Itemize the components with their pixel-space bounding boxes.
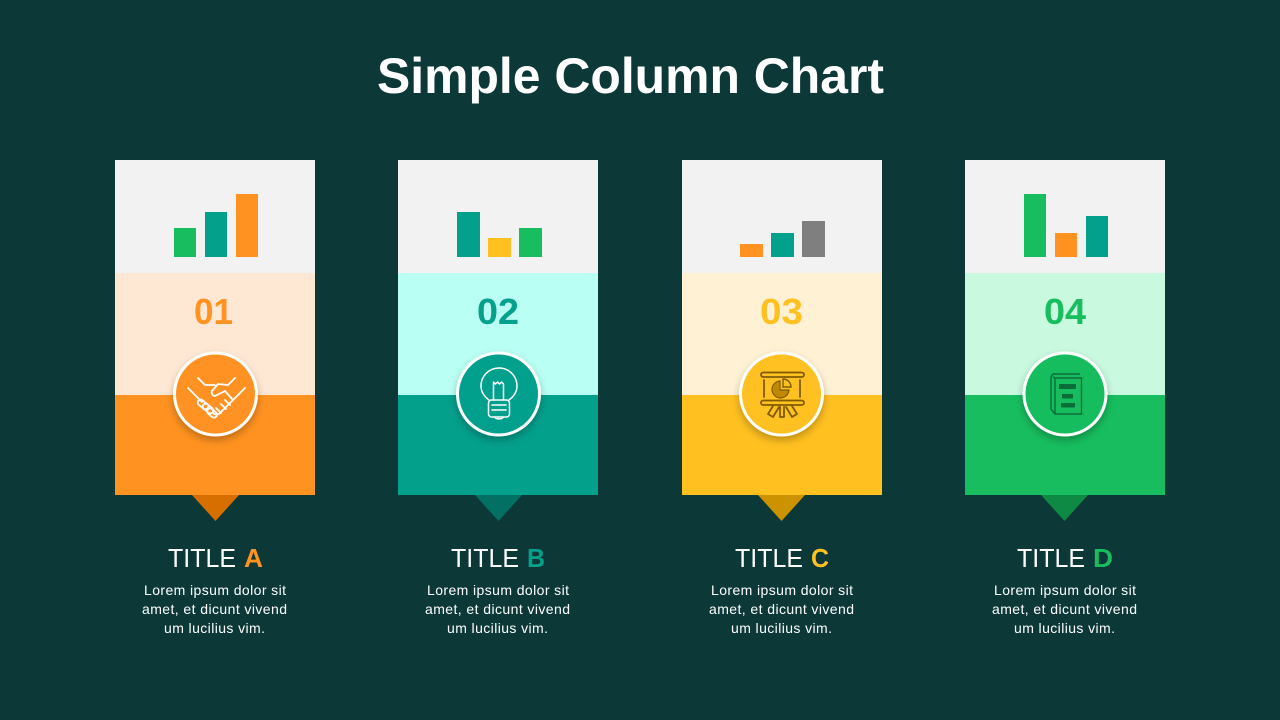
bar chart D [1024, 194, 1108, 257]
panel: column C: C [811, 543, 829, 573]
text block B [425, 582, 570, 636]
bar chart B [457, 212, 542, 257]
card bottom: solid panel [398, 395, 598, 495]
text block A: Lorem ipsum dolor sit [144, 582, 286, 598]
number 01: 01 [194, 291, 233, 332]
text block B: Lorem ipsum dolor sit [427, 582, 569, 598]
card middle: tint panel [965, 273, 1165, 395]
text block C: um lucilius vim. [731, 620, 832, 636]
panel: column B [398, 160, 598, 636]
text block B: amet, et dicunt vivend [425, 601, 570, 617]
number 03: 03 [760, 291, 803, 332]
heading: title C: TITLE [735, 543, 803, 573]
text block A [142, 582, 287, 636]
pointer A [192, 495, 239, 521]
icon: handshake [174, 353, 256, 435]
text block D: um lucilius vim. [1014, 620, 1115, 636]
heading: title D: TITLE [1017, 543, 1085, 573]
icon: presentation board [740, 353, 822, 435]
panel: column D: D [1093, 543, 1113, 573]
panel: column D [965, 160, 1165, 636]
pointer D [1041, 495, 1088, 521]
card bottom: solid panel [682, 395, 882, 495]
pointer C [758, 495, 805, 521]
card middle: tint panel [115, 273, 315, 395]
text block D [992, 582, 1137, 636]
number 02: 02 [477, 291, 519, 332]
bar chart C [740, 221, 825, 257]
panel: column C [682, 160, 882, 636]
card top: light panel [398, 160, 598, 274]
text block B: um lucilius vim. [447, 620, 548, 636]
text block C [709, 582, 854, 636]
heading: title A: TITLE [168, 543, 236, 573]
card top: light panel [115, 160, 315, 274]
title: Simple Column Chart [377, 48, 884, 104]
card top: light panel [965, 160, 1165, 274]
card bottom: solid panel [115, 395, 315, 495]
card middle: tint panel [682, 273, 882, 395]
text block A: um lucilius vim. [164, 620, 265, 636]
pointer B [475, 495, 522, 521]
text block C: Lorem ipsum dolor sit [711, 582, 853, 598]
card middle: tint panel [398, 273, 598, 395]
text block D: Lorem ipsum dolor sit [994, 582, 1136, 598]
text block C: amet, et dicunt vivend [709, 601, 854, 617]
card top: light panel [682, 160, 882, 274]
text block A: amet, et dicunt vivend [142, 601, 287, 617]
panel: column A [115, 160, 315, 636]
icon: book [1024, 353, 1106, 435]
number 04: 04 [1044, 291, 1086, 332]
text block D: amet, et dicunt vivend [992, 601, 1137, 617]
panel: column A: A [244, 543, 263, 573]
panel: column B: B [527, 543, 545, 573]
bar chart A [174, 194, 258, 257]
card bottom: solid panel [965, 395, 1165, 495]
icon: light bulb [458, 353, 540, 435]
heading: title B: TITLE [451, 543, 519, 573]
